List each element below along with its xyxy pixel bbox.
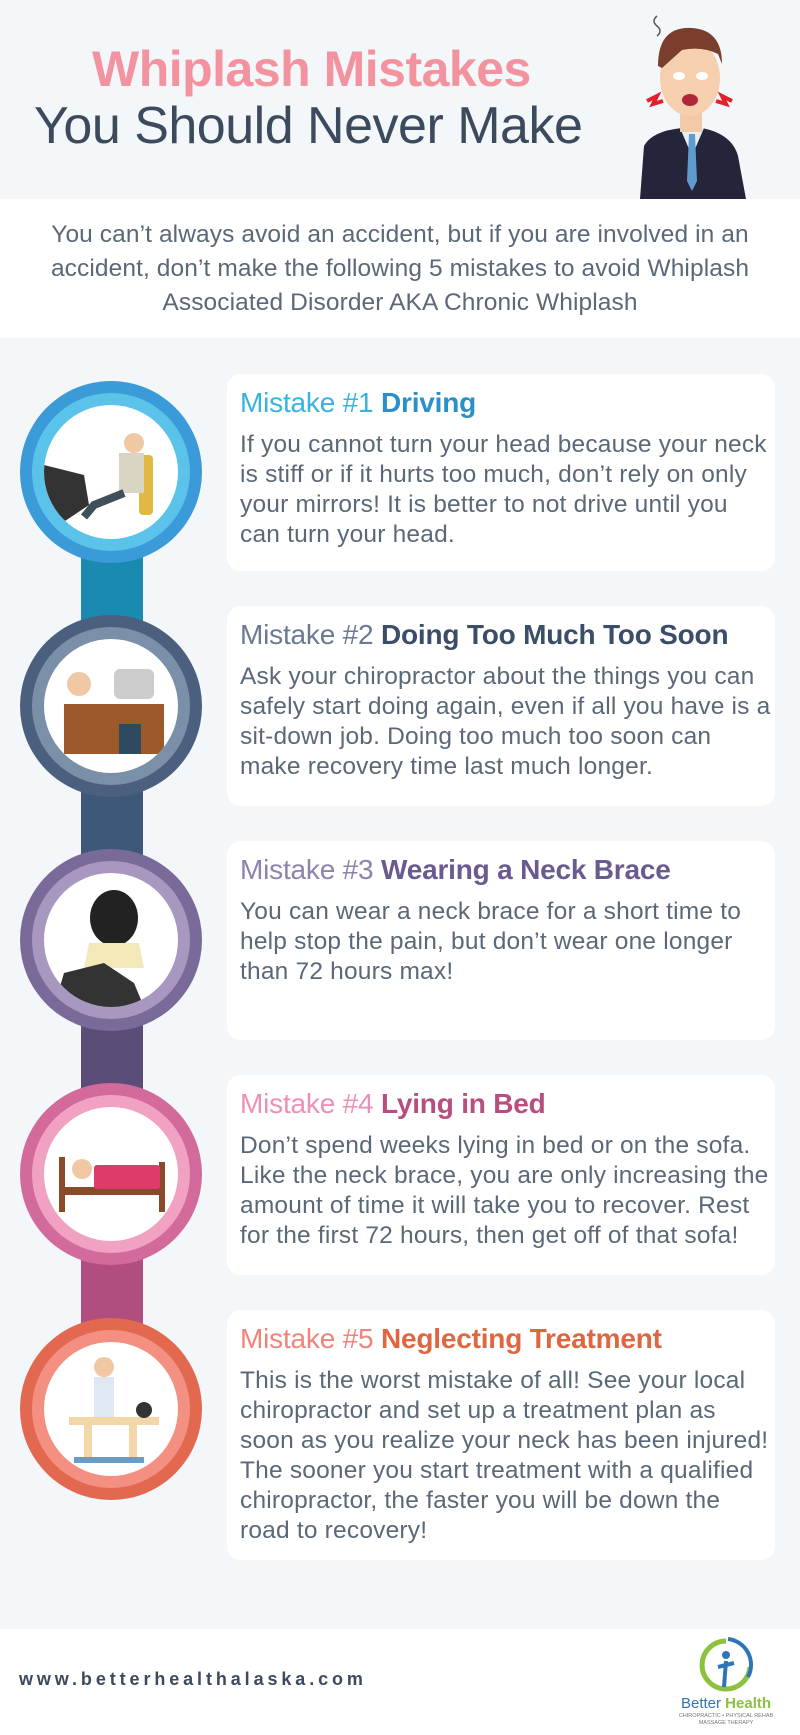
text 1: If you cannot turn your head because your neck <box>240 431 767 458</box>
text 3: help stop the pain, but don’t wear one longer <box>240 928 733 955</box>
circle 2: desk <box>20 615 202 797</box>
heading 2: Mistake #2 Doing Too Much Too Soon <box>240 619 728 650</box>
logo <box>679 1637 773 1726</box>
text 3 <box>240 898 741 985</box>
card 4 <box>227 1075 775 1275</box>
heading 4: Mistake #4 Lying in Bed <box>240 1088 546 1119</box>
website url: www.betterhealthalaska.com <box>19 1669 367 1689</box>
text 2: safely start doing again, even if all you have is a <box>240 693 770 720</box>
header band <box>0 0 800 199</box>
heading 3: Mistake #3 Wearing a Neck Brace <box>240 854 671 885</box>
title <box>34 41 582 155</box>
circle 3: neck brace <box>20 849 202 1031</box>
footer <box>0 1629 800 1735</box>
text 4: amount of time it will take you to recover. Rest <box>240 1192 749 1219</box>
card 2 <box>227 606 775 806</box>
text 3: than 72 hours max! <box>240 958 453 985</box>
circle 1: driving <box>20 381 202 563</box>
card 1 <box>227 374 775 571</box>
text 5: soon as you realize your neck has been injured! <box>240 1427 768 1454</box>
circle 5: treatment <box>20 1318 202 1500</box>
title: You Should Never Make <box>34 97 582 155</box>
text 4 <box>240 1132 768 1249</box>
text 5: This is the worst mistake of all! See your local <box>240 1367 745 1394</box>
text 2: make recovery time last much longer. <box>240 753 653 780</box>
intro text <box>0 199 800 338</box>
text 4: Like the neck brace, you are only increasing the <box>240 1162 768 1189</box>
text 1: your mirrors! It is better to not drive until you <box>240 491 728 518</box>
card 3 <box>227 841 775 1040</box>
text 1 <box>240 431 767 548</box>
text 5 <box>240 1367 768 1544</box>
card 5 <box>227 1310 775 1560</box>
text 4: for the first 72 hours, then get off of that sofa! <box>240 1222 738 1249</box>
text 5: road to recovery! <box>240 1517 427 1544</box>
text 5: The sooner you start treatment with a qualified <box>240 1457 753 1484</box>
text 5: chiropractor and set up a treatment plan as <box>240 1397 716 1424</box>
logo: CHIROPRACTIC • PHYSICAL REHAB <box>679 1713 773 1719</box>
logo: Better Health <box>681 1695 771 1712</box>
text 1: is stiff or if it hurts too much, don’t rely on only <box>240 461 747 488</box>
text 3: You can wear a neck brace for a short time to <box>240 898 741 925</box>
text 2: Ask your chiropractor about the things you can <box>240 663 754 690</box>
heading 1: Mistake #1 Driving <box>240 387 476 418</box>
icon: man with neck pain <box>640 16 746 199</box>
intro text: accident, don’t make the following 5 mistakes to avoid Whiplash <box>51 255 749 282</box>
logo: MASSAGE THERAPY <box>699 1720 753 1726</box>
connector bars <box>81 540 143 650</box>
title: Whiplash Mistakes <box>92 41 531 97</box>
intro text: You can’t always avoid an accident, but if you are involved in an <box>51 221 749 248</box>
text 1: can turn your head. <box>240 521 455 548</box>
text 4: Don’t spend weeks lying in bed or on the sofa. <box>240 1132 750 1159</box>
heading 5: Mistake #5 Neglecting Treatment <box>240 1323 662 1354</box>
text 2: sit-down job. Doing too much too soon can <box>240 723 711 750</box>
circle 4: bed <box>20 1083 202 1265</box>
text 5: chiropractor, the faster you will be down the <box>240 1487 720 1514</box>
text 2 <box>240 663 770 780</box>
intro text: Associated Disorder AKA Chronic Whiplash <box>162 289 638 316</box>
